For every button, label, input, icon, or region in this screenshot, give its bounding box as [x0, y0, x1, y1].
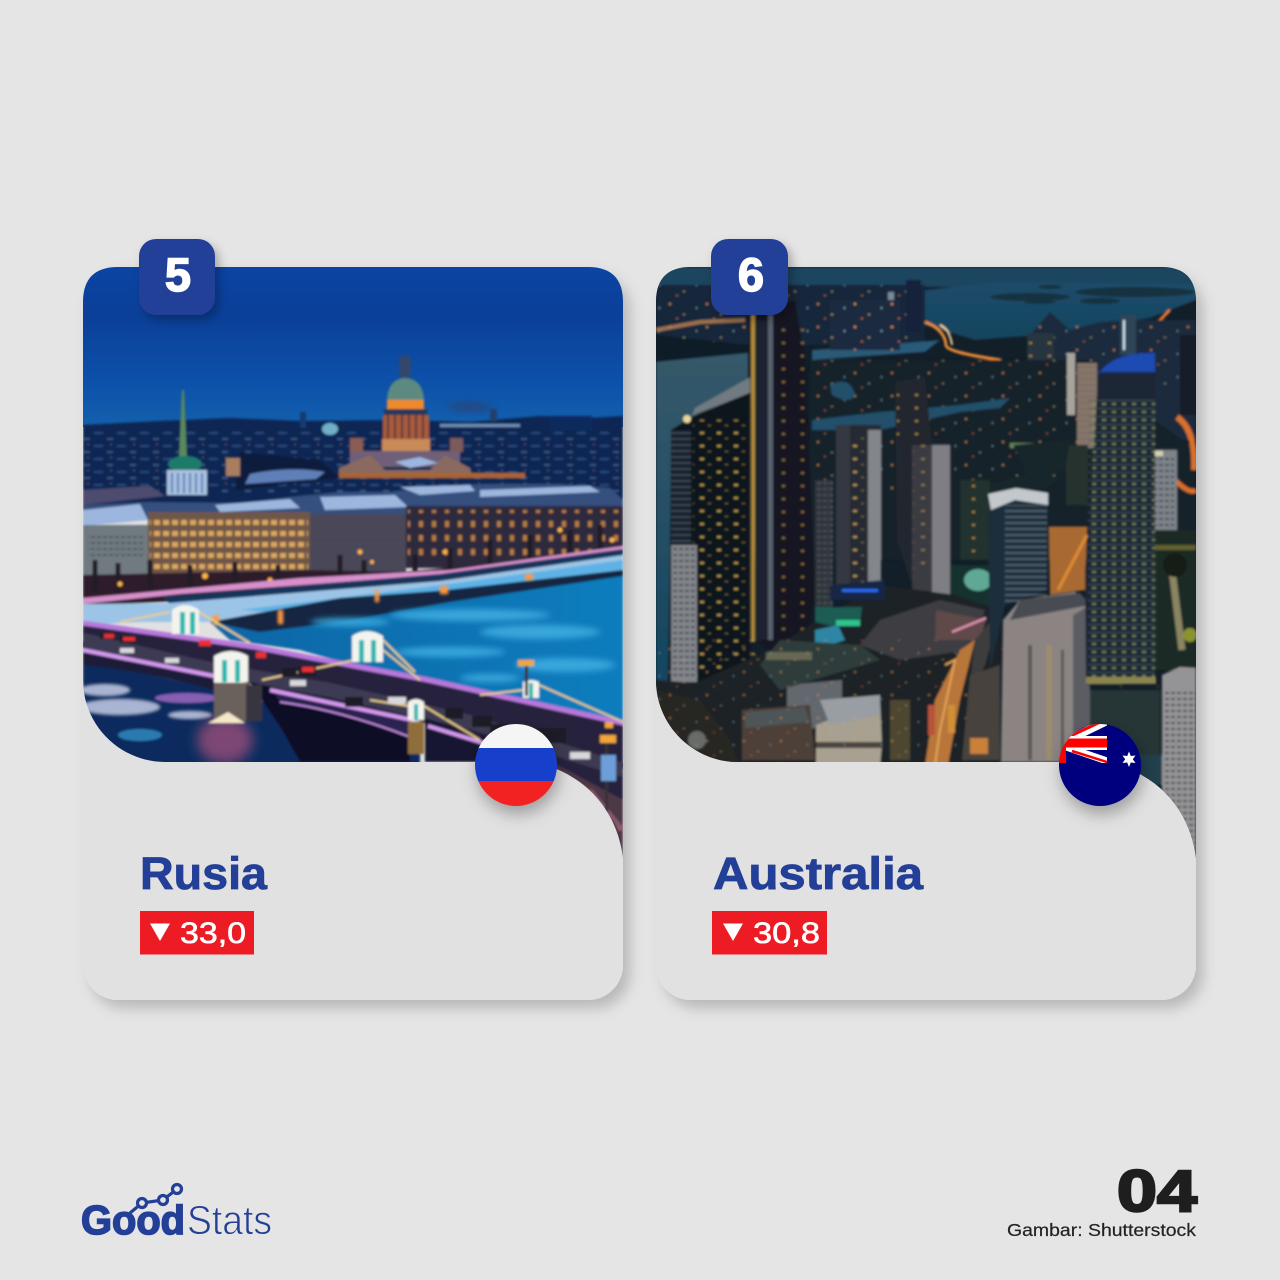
- Admiralty spire: [179, 390, 187, 462]
- roofs: [83, 484, 623, 520]
- photo: Gold Coast at night: [656, 267, 1197, 867]
- bridge towers: [172, 605, 539, 720]
- green and orange centre: [951, 564, 989, 606]
- tree line and quay: [83, 566, 531, 606]
- flag jack diagonals: [1059, 724, 1107, 763]
- water: [210, 570, 623, 725]
- main avenue: [925, 640, 975, 765]
- rank badge 5: 5: [165, 248, 191, 301]
- pink embankment: [83, 546, 623, 604]
- logo: GoodStats: [81, 1184, 272, 1243]
- ice strip: [83, 555, 623, 625]
- logo wordmark: Good: [81, 1197, 185, 1243]
- bridge deck: [83, 623, 623, 800]
- left river: [656, 353, 748, 682]
- orange road: [925, 322, 1001, 360]
- icon: Russian flag: [475, 724, 557, 806]
- right far towers: [1030, 312, 1196, 440]
- palace facades: [83, 525, 148, 575]
- value tag: 30,8: 30,8: [753, 917, 820, 950]
- bridge arches: [83, 648, 214, 690]
- lamp post: [605, 735, 608, 815]
- country name: Australia: Australia: [713, 848, 924, 899]
- blue topped tower: [1085, 353, 1155, 685]
- rank badge 6: 6: [738, 248, 764, 301]
- rank badge 6: [711, 239, 788, 315]
- ground buildings: [656, 585, 1000, 770]
- country name: Rusia: Rusia: [140, 848, 268, 899]
- cables: [120, 612, 623, 740]
- source credit: Gambar: Shutterstock: [1007, 1220, 1196, 1240]
- tall dark tower: [748, 300, 815, 650]
- mid suburb with canals: [810, 360, 1090, 560]
- cars: [100, 633, 566, 743]
- cathedral: [399, 355, 411, 379]
- bridge piers: [214, 683, 250, 721]
- value tag: 33,0: [140, 911, 254, 954]
- distant right buildings: [1077, 363, 1097, 448]
- midrise cluster: [848, 424, 882, 584]
- panel: Rusia card: [80, 239, 623, 1000]
- distant city: [656, 285, 925, 345]
- logo: GoodStats: Stats: [187, 1197, 272, 1243]
- panel: Australia card: [656, 239, 1197, 1000]
- logo graph line: [130, 1184, 182, 1213]
- photo: Saint Petersburg at dusk: [80, 267, 623, 860]
- icon: Australian flag: [1058, 719, 1141, 806]
- value tag: 33,0: 33,0: [180, 917, 246, 950]
- right bottom strip: [1155, 530, 1196, 670]
- card base: [656, 267, 1196, 1000]
- page number: 04: [1117, 1159, 1197, 1224]
- rank badge 5: [139, 239, 215, 315]
- beige hotel tower: [1049, 527, 1087, 595]
- lower left water: [83, 660, 420, 770]
- value tag: 30,8: [712, 911, 827, 954]
- card base: [83, 267, 623, 1000]
- left tower: [670, 392, 750, 683]
- lower right road: [556, 764, 623, 858]
